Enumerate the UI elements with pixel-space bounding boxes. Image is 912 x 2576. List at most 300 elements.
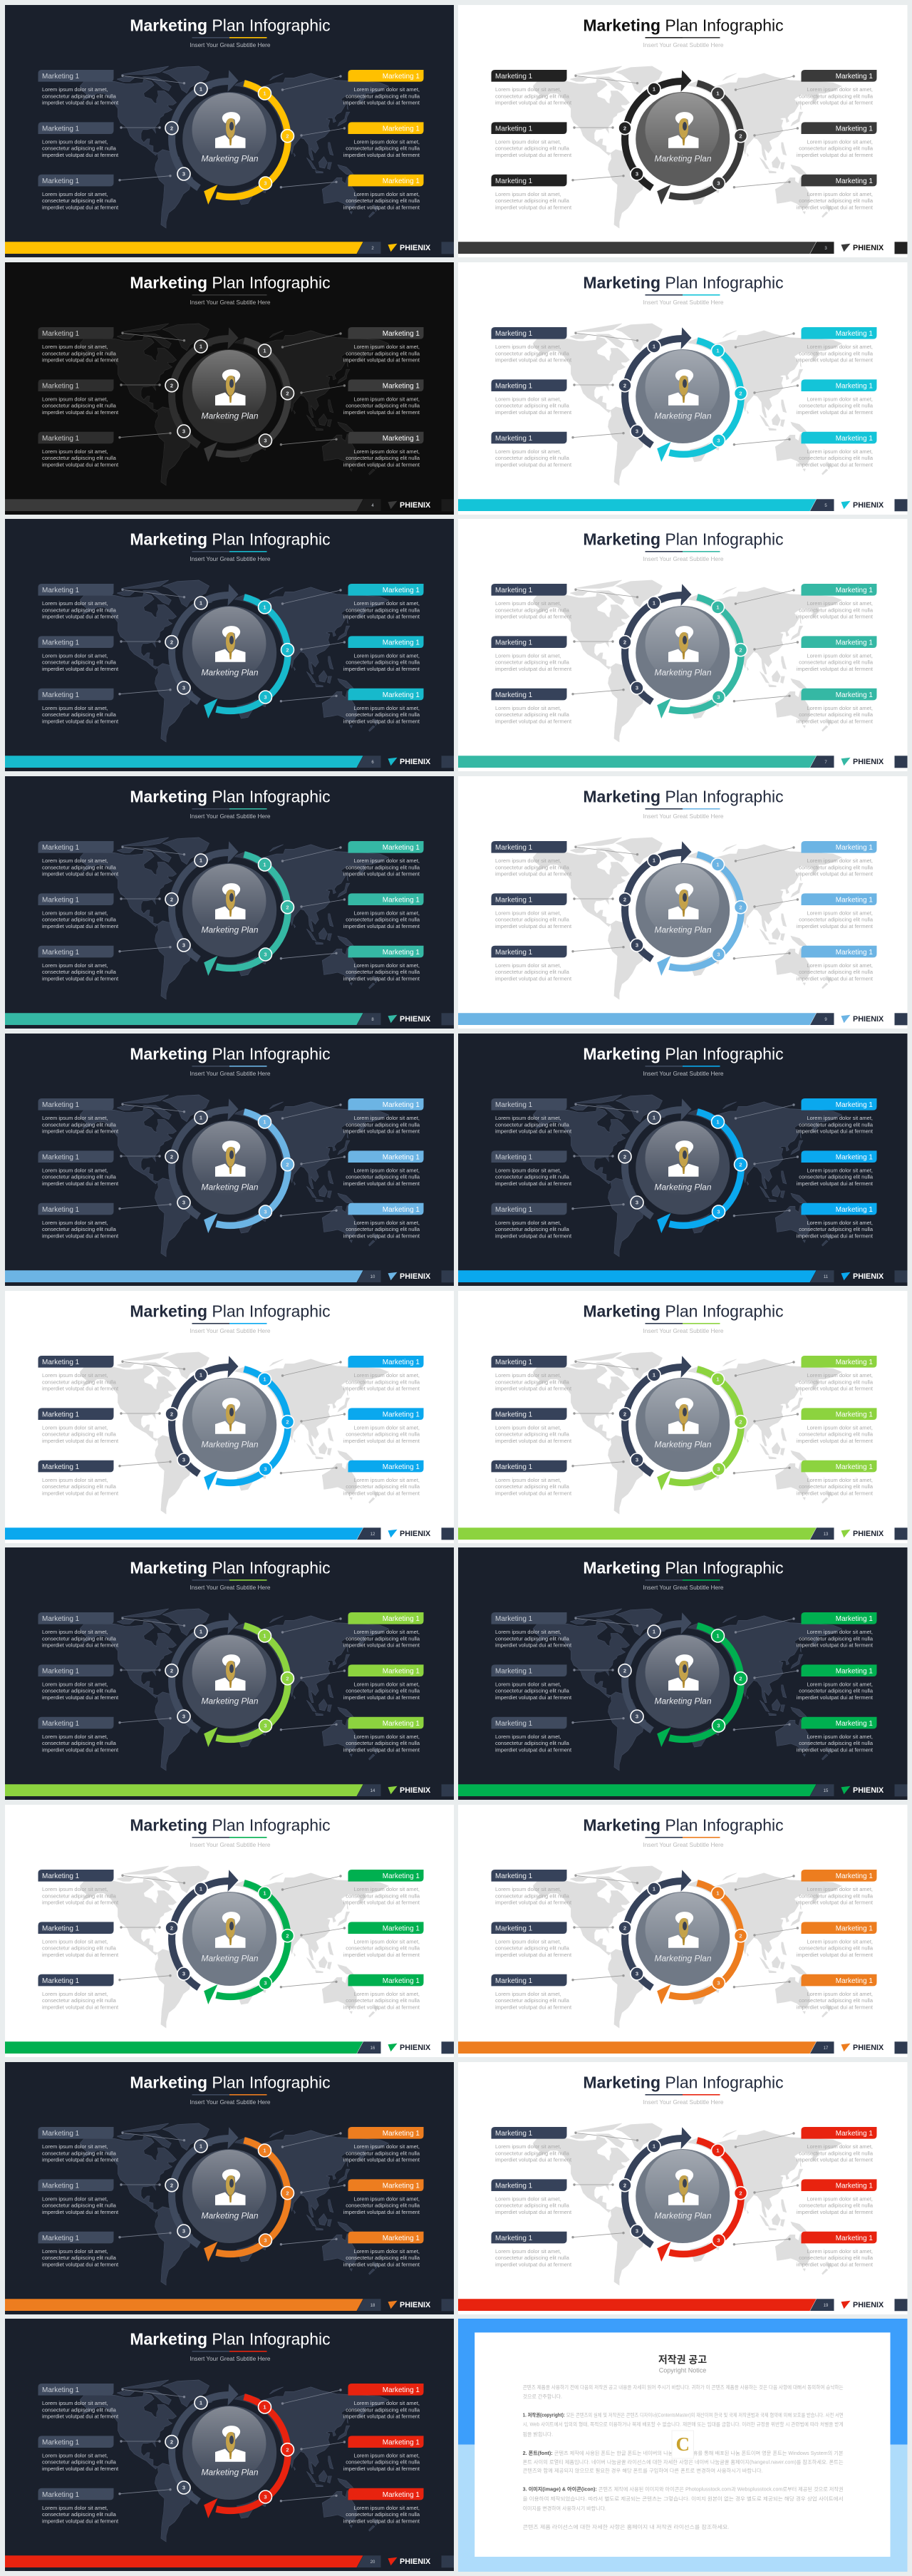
card: right 1: consectetur adipiscing elit nulla — [346, 1892, 420, 1899]
card: left 1: consectetur adipiscing elit nulla — [41, 2407, 116, 2413]
card: left 2: consectetur adipiscing elit nulla — [41, 659, 116, 666]
card: right 1: consectetur adipiscing elit nulla — [346, 864, 420, 870]
card: left 1 — [492, 841, 572, 877]
arrow: left arc — [625, 841, 692, 959]
card: left 3: Lorem ipsum dolor sit amet, — [495, 448, 561, 454]
card: right 2 — [343, 122, 423, 158]
card: right 3: consectetur adipiscing elit nulla — [346, 455, 420, 461]
card: left 2 — [492, 122, 572, 158]
card: left 3: Lorem ipsum dolor sit amet, — [41, 1733, 108, 1740]
card: left 1: consectetur adipiscing elit nulla — [495, 864, 570, 870]
card: right 2: consectetur adipiscing elit nulla — [346, 402, 420, 408]
footer: 17 — [824, 2046, 829, 2051]
card: right 2 — [343, 2179, 423, 2215]
center hub — [629, 599, 736, 706]
center hub — [176, 1371, 283, 1478]
panel: slide 19 white red — [458, 2062, 908, 2314]
card: right 1: Lorem ipsum dolor sit amet, — [353, 1115, 419, 1121]
step nodes: 3 — [182, 2485, 185, 2491]
connector lines — [118, 75, 345, 188]
card: right 1: Lorem ipsum dolor sit amet, — [807, 2143, 873, 2150]
card: right 3 — [343, 2488, 423, 2525]
card: left 2 — [492, 1922, 572, 1958]
card: right 2: Marketing 1 — [836, 639, 874, 647]
card: left 2 — [38, 1922, 119, 1958]
connector lines — [118, 2389, 345, 2502]
card: left 2: Lorem ipsum dolor sit amet, — [495, 653, 561, 659]
card: left 3: consectetur adipiscing elit nulla — [495, 1226, 570, 1232]
card: left 1 — [492, 584, 572, 620]
connector lines — [118, 332, 345, 445]
card: right 2: Lorem ipsum dolor sit amet, — [353, 1424, 419, 1431]
background — [458, 5, 908, 257]
world map — [80, 1609, 388, 1771]
footer: 3 — [825, 247, 828, 251]
notice body text: 콘텐츠 제품 라이선스에 대한 자세한 사항은 홈페이지 내 저작권 라이선스를 참조하세요. — [523, 2524, 730, 2530]
card: right 3 — [343, 431, 423, 468]
card: left 1: imperdiet volutpat dui at ferment — [41, 2413, 119, 2420]
card: left 2: imperdiet volutpat dui at ferment — [41, 1180, 119, 1187]
card: left 1: Lorem ipsum dolor sit amet, — [41, 1886, 108, 1892]
card: left 3: imperdiet volutpat dui at ferment — [495, 2261, 572, 2267]
world map — [80, 1095, 388, 1257]
card: right 3: consectetur adipiscing elit nulla — [799, 1483, 874, 1490]
title: Marketing Plan Infographic — [130, 2330, 330, 2349]
card: right 3: Marketing 1 — [836, 2235, 874, 2242]
card: right 1 — [343, 584, 423, 620]
card: left 1: Marketing 1 — [495, 1101, 533, 1109]
card: right 2: imperdiet volutpat dui at ferment — [343, 1952, 420, 1958]
card: right 2: Marketing 1 — [382, 1925, 420, 1932]
card: right 3: Lorem ipsum dolor sit amet, — [353, 1991, 419, 1997]
panel: slide 17 white orange — [458, 1805, 908, 2057]
card: left 2: imperdiet volutpat dui at ferment — [495, 1438, 572, 1444]
card: left 3: Lorem ipsum dolor sit amet, — [41, 962, 108, 969]
card: left 1: Marketing 1 — [495, 1359, 533, 1366]
card: right 3: Marketing 1 — [382, 2235, 420, 2242]
card: left 1: Marketing 1 — [41, 844, 79, 852]
hub label: Marketing Plan — [201, 1439, 258, 1449]
card: left 2 — [38, 893, 119, 929]
card: left 1: Marketing 1 — [495, 73, 533, 81]
card: right 2: Lorem ipsum dolor sit amet, — [353, 1938, 419, 1944]
notice subheading: Copyright Notice — [659, 2367, 707, 2374]
card: right 3: imperdiet volutpat dui at ferment — [343, 205, 420, 211]
step nodes: 3 — [636, 1714, 638, 1720]
card: right 1: imperdiet volutpat dui at ferment — [797, 614, 874, 620]
card: left 1: consectetur adipiscing elit nulla — [41, 1635, 116, 1642]
title: Marketing Plan Infographic — [130, 530, 330, 549]
hub label: Marketing Plan — [201, 668, 258, 678]
card: right 1: imperdiet volutpat dui at ferment — [797, 1900, 874, 1906]
footer — [4, 1784, 454, 1796]
card: right 1: imperdiet volutpat dui at ferment — [343, 1900, 420, 1906]
step nodes: 2 — [170, 2439, 173, 2446]
card: left 2: Lorem ipsum dolor sit amet, — [41, 396, 108, 402]
card: right 1: consectetur adipiscing elit nulla — [799, 2150, 874, 2156]
connector lines — [118, 1617, 345, 1731]
card: left 1: imperdiet volutpat dui at ferment — [41, 1642, 119, 1649]
card: right 3 — [797, 1460, 877, 1496]
card: right 3: Lorem ipsum dolor sit amet, — [807, 1220, 873, 1226]
card: right 2: Marketing 1 — [382, 382, 420, 390]
card: right 2: imperdiet volutpat dui at ferment — [343, 923, 420, 929]
card: right 3: consectetur adipiscing elit nulla — [799, 455, 874, 461]
arrow: right arc — [204, 1111, 288, 1233]
center hub — [629, 1885, 736, 1992]
card: left 1: Lorem ipsum dolor sit amet, — [495, 1629, 561, 1635]
card: left 3: consectetur adipiscing elit nulla — [41, 711, 116, 718]
panel: slide 2 dark yellow — [5, 5, 454, 257]
card: right 2: Marketing 1 — [836, 1153, 874, 1161]
footer: 20 — [370, 2560, 375, 2565]
step nodes: 3 — [636, 942, 638, 949]
card: left 2: Marketing 1 — [495, 897, 533, 905]
card: right 2: consectetur adipiscing elit nulla — [799, 1945, 874, 1952]
card: left 1: consectetur adipiscing elit nulla — [495, 1121, 570, 1128]
card: left 2 — [38, 122, 119, 158]
card: left 1: imperdiet volutpat dui at ferment — [495, 871, 572, 877]
card: left 1 — [38, 1356, 119, 1391]
card: right 2 — [343, 1150, 423, 1187]
card: right 1: Marketing 1 — [836, 330, 874, 338]
step nodes: 3 — [636, 1199, 638, 1205]
notice body text: 콘텐츠 제품을 사용하기 전에 다음의 저작권 공고 내용을 자세히 읽어 주시기 바랍니다. 귀하가 이 콘텐츠 제품을 사용하는 것은 다음 사항에 대해서 동의하여 승낙하는 — [523, 2384, 844, 2391]
card: left 1: consectetur adipiscing elit nulla — [495, 607, 570, 614]
step nodes: 1 — [653, 86, 656, 93]
card: left 2: imperdiet volutpat dui at ferment — [495, 1952, 572, 1958]
card: left 2: consectetur adipiscing elit nulla — [41, 145, 116, 152]
card: left 2: Marketing 1 — [495, 125, 533, 133]
card: right 2: consectetur adipiscing elit nulla — [346, 1431, 420, 1437]
icon: person — [668, 1654, 699, 1691]
card: left 3: Marketing 1 — [495, 691, 533, 699]
card: right 3: imperdiet volutpat dui at ferment — [343, 2261, 420, 2267]
card: left 1 — [38, 1612, 119, 1649]
card: left 1 — [492, 327, 572, 363]
card: left 2 — [38, 1408, 119, 1444]
card: right 3 — [343, 1974, 423, 2010]
step nodes: 3 — [264, 437, 266, 443]
title: Marketing Plan Infographic — [584, 1302, 784, 1320]
card: right 1 — [797, 327, 877, 363]
card: right 2: consectetur adipiscing elit nulla — [799, 1688, 874, 1694]
background — [4, 2062, 454, 2314]
notice sheet — [475, 2333, 891, 2557]
card: right 2: imperdiet volutpat dui at ferment — [797, 666, 874, 672]
card: right 3: Lorem ipsum dolor sit amet, — [807, 705, 873, 711]
card: left 2: Lorem ipsum dolor sit amet, — [41, 1167, 108, 1173]
world map — [80, 1351, 388, 1513]
arrow: left arc — [625, 1612, 692, 1731]
card: left 1: consectetur adipiscing elit nulla — [41, 864, 116, 870]
card: right 3: consectetur adipiscing elit nulla — [346, 711, 420, 718]
world map — [533, 1609, 842, 1771]
card: left 1: consectetur adipiscing elit nulla — [41, 2150, 116, 2156]
card: right 2: Marketing 1 — [382, 1153, 420, 1161]
card: left 2: Lorem ipsum dolor sit amet, — [495, 2195, 561, 2202]
step nodes: 1 — [199, 1629, 202, 1635]
card: right 2: Lorem ipsum dolor sit amet, — [807, 910, 873, 916]
background band: blue — [458, 2319, 908, 2445]
card: left 2: consectetur adipiscing elit nulla — [495, 917, 570, 923]
card: left 2: Marketing 1 — [41, 2439, 79, 2447]
card: right 3: Lorem ipsum dolor sit amet, — [807, 448, 873, 454]
card: left 3: consectetur adipiscing elit nulla — [41, 1226, 116, 1232]
card: left 2: Marketing 1 — [41, 1411, 79, 1418]
title: Marketing Plan Infographic — [130, 1558, 330, 1577]
background — [4, 262, 454, 515]
step nodes: 2 — [286, 2190, 289, 2196]
card: left 3: consectetur adipiscing elit nulla — [495, 1740, 570, 1746]
card: right 2: imperdiet volutpat dui at ferment — [797, 2209, 874, 2215]
arrow: left arc — [172, 70, 238, 188]
card: right 3: imperdiet volutpat dui at ferment — [797, 1490, 874, 1496]
card: right 3: Marketing 1 — [382, 1206, 420, 1214]
card: right 2: Marketing 1 — [836, 1925, 874, 1932]
footer — [458, 242, 908, 254]
title rule — [646, 551, 720, 552]
background — [4, 2319, 454, 2571]
card: left 1: Lorem ipsum dolor sit amet, — [495, 86, 561, 93]
card: right 1: Lorem ipsum dolor sit amet, — [807, 1115, 873, 1121]
footer — [4, 1270, 454, 1282]
center hub — [629, 2143, 736, 2250]
card: right 3: Marketing 1 — [836, 435, 874, 443]
card: right 2: Lorem ipsum dolor sit amet, — [807, 1424, 873, 1431]
arrow: right arc — [657, 2140, 741, 2262]
step nodes: 1 — [199, 86, 202, 93]
step nodes — [165, 83, 294, 190]
card: right 1 — [797, 1098, 877, 1134]
notice body text: 됨을 밝힙니다. — [523, 2431, 553, 2438]
card: left 2: Marketing 1 — [41, 1153, 79, 1161]
card: right 3: imperdiet volutpat dui at ferment — [343, 718, 420, 725]
card: left 2: consectetur adipiscing elit nulla — [41, 1688, 116, 1694]
card: left 2: Marketing 1 — [495, 639, 533, 647]
step nodes: 2 — [623, 1153, 626, 1160]
card: right 1: Lorem ipsum dolor sit amet, — [807, 344, 873, 350]
card: right 1 — [343, 1612, 423, 1649]
step nodes: 1 — [263, 347, 266, 354]
card: right 3: Lorem ipsum dolor sit amet, — [353, 191, 419, 197]
connector lines — [118, 846, 345, 959]
card: right 3: Lorem ipsum dolor sit amet, — [353, 1220, 419, 1226]
step nodes — [165, 2396, 294, 2503]
hub label: Marketing Plan — [201, 1954, 258, 1964]
card: right 1 — [343, 70, 423, 106]
footer: PHIENIX — [853, 244, 884, 252]
card: left 2: imperdiet volutpat dui at ferment — [495, 666, 572, 672]
card: right 3: Marketing 1 — [836, 1720, 874, 1728]
card: right 2: Lorem ipsum dolor sit amet, — [353, 910, 419, 916]
step nodes: 1 — [653, 1629, 656, 1635]
step nodes — [618, 1625, 747, 1732]
card: right 1: consectetur adipiscing elit nulla — [346, 2407, 420, 2413]
center hub — [629, 343, 736, 450]
card: right 1: imperdiet volutpat dui at ferment — [797, 356, 874, 363]
title: Marketing Plan Infographic — [584, 273, 784, 292]
step nodes: 1 — [263, 604, 266, 611]
step nodes: 3 — [182, 1199, 185, 1205]
card: right 2: Lorem ipsum dolor sit amet, — [353, 1681, 419, 1688]
subtitle: Insert Your Great Subtitle Here — [643, 813, 724, 820]
card: left 3: imperdiet volutpat dui at ferment — [41, 1232, 119, 1239]
hub label: Marketing Plan — [201, 1696, 258, 1706]
card: left 1: imperdiet volutpat dui at ferment — [495, 1385, 572, 1391]
card: left 1: consectetur adipiscing elit nulla — [41, 1121, 116, 1128]
step nodes: 1 — [263, 2404, 266, 2411]
card: left 2: imperdiet volutpat dui at ferment — [495, 152, 572, 158]
arrow: right arc — [657, 83, 741, 205]
card: right 1: imperdiet volutpat dui at ferment — [797, 871, 874, 877]
card: left 3: Marketing 1 — [41, 2235, 79, 2242]
card: right 1: consectetur adipiscing elit nulla — [346, 607, 420, 614]
card: right 3: consectetur adipiscing elit nulla — [799, 711, 874, 718]
arrow: left arc — [172, 1356, 238, 1473]
hub label: Marketing Plan — [201, 925, 258, 935]
arrow: right arc — [657, 1369, 741, 1490]
step nodes — [618, 854, 747, 961]
step nodes — [165, 1111, 294, 1218]
connector lines — [572, 1617, 799, 1731]
card: left 3: Marketing 1 — [495, 1206, 533, 1214]
footer: 11 — [824, 1275, 829, 1279]
icon: person — [215, 2426, 245, 2462]
step nodes — [618, 83, 747, 190]
step nodes: 3 — [264, 694, 266, 701]
footer: 12 — [370, 1532, 375, 1537]
center hub — [629, 1628, 736, 1735]
card: right 1: Marketing 1 — [836, 1101, 874, 1109]
card: left 1: Marketing 1 — [495, 2130, 533, 2138]
card: right 1: Lorem ipsum dolor sit amet, — [807, 1371, 873, 1379]
card: left 2: Lorem ipsum dolor sit amet, — [41, 910, 108, 916]
step nodes: 2 — [286, 1932, 289, 1939]
icon: person — [215, 2169, 245, 2205]
step nodes: 2 — [170, 1668, 173, 1674]
footer: 14 — [370, 1789, 375, 1793]
card: left 2: consectetur adipiscing elit nulla — [495, 1431, 570, 1437]
card: left 3: Marketing 1 — [41, 177, 79, 185]
step nodes: 3 — [717, 952, 720, 958]
step nodes: 1 — [653, 343, 656, 349]
card: left 3 — [38, 175, 119, 211]
connector lines — [572, 589, 799, 702]
card: right 3: imperdiet volutpat dui at ferment — [343, 976, 420, 982]
card: right 3: Lorem ipsum dolor sit amet, — [353, 1476, 419, 1483]
step nodes: 1 — [199, 600, 202, 607]
background — [458, 1290, 908, 1542]
card: right 3: imperdiet volutpat dui at ferment — [797, 2261, 874, 2267]
subtitle: Insert Your Great Subtitle Here — [190, 1841, 270, 1848]
card: left 2: consectetur adipiscing elit nulla — [41, 2202, 116, 2208]
card: left 3: consectetur adipiscing elit nulla — [41, 1997, 116, 2004]
connector lines — [118, 2132, 345, 2245]
icon: person — [215, 1912, 245, 1948]
title: Marketing Plan Infographic — [130, 1815, 330, 1834]
step nodes: 1 — [653, 600, 656, 607]
card: left 1 — [492, 1870, 572, 1906]
card: right 1: Lorem ipsum dolor sit amet, — [353, 86, 419, 93]
card: right 3: imperdiet volutpat dui at ferment — [797, 461, 874, 468]
subtitle: Insert Your Great Subtitle Here — [190, 1584, 270, 1591]
card: right 2: imperdiet volutpat dui at ferment — [343, 409, 420, 416]
world map — [80, 66, 388, 228]
card: left 2: consectetur adipiscing elit nulla — [495, 145, 570, 152]
card: left 1: imperdiet volutpat dui at ferment — [41, 2156, 119, 2163]
step nodes: 1 — [653, 1886, 656, 1892]
world map — [533, 324, 842, 485]
card: left 3: consectetur adipiscing elit nulla — [495, 969, 570, 975]
card: left 3: consectetur adipiscing elit nulla — [495, 455, 570, 461]
card: right 2: Marketing 1 — [836, 125, 874, 133]
connector lines — [118, 1875, 345, 1988]
step nodes: 1 — [263, 1118, 266, 1125]
card: right 1: imperdiet volutpat dui at ferment — [797, 100, 874, 106]
card: left 1 — [38, 2127, 119, 2163]
footer: PHIENIX — [399, 2301, 430, 2309]
card: left 3: imperdiet volutpat dui at ferment — [495, 1490, 572, 1496]
card: left 3: imperdiet volutpat dui at ferment — [495, 1747, 572, 1753]
step nodes: 3 — [636, 685, 638, 691]
step nodes — [618, 1882, 747, 1989]
card: right 1: consectetur adipiscing elit nulla — [346, 1121, 420, 1128]
card: left 3: imperdiet volutpat dui at ferment — [41, 461, 119, 468]
background — [4, 1547, 454, 1800]
card: right 2 — [797, 1408, 877, 1444]
card: left 3: Lorem ipsum dolor sit amet, — [41, 191, 108, 197]
card: right 1: Lorem ipsum dolor sit amet, — [353, 1886, 419, 1892]
card: left 1: Lorem ipsum dolor sit amet, — [41, 1115, 108, 1121]
background — [458, 519, 908, 771]
card: left 3: consectetur adipiscing elit nulla — [41, 2255, 116, 2261]
card: left 3: Marketing 1 — [41, 2491, 79, 2499]
center hub — [629, 1371, 736, 1478]
card: right 2: imperdiet volutpat dui at ferment — [797, 923, 874, 929]
title rule — [192, 2094, 266, 2095]
card: right 2 — [343, 2436, 423, 2472]
card: right 1: consectetur adipiscing elit nulla — [346, 1635, 420, 1642]
card: right 3: imperdiet volutpat dui at ferment — [797, 205, 874, 211]
footer: PHIENIX — [399, 758, 430, 766]
card: right 3: Marketing 1 — [382, 1977, 420, 1985]
footer — [458, 1784, 908, 1796]
center hub — [176, 2143, 283, 2250]
title rule — [192, 1580, 266, 1581]
arrow: left arc — [172, 1612, 238, 1731]
card: left 1: consectetur adipiscing elit nulla — [41, 607, 116, 614]
card: right 3: imperdiet volutpat dui at ferment — [343, 2518, 420, 2525]
card: left 2 — [492, 2179, 572, 2215]
card: left 2: Lorem ipsum dolor sit amet, — [41, 1424, 108, 1431]
connector lines — [118, 589, 345, 702]
card: left 2: imperdiet volutpat dui at ferment — [495, 923, 572, 929]
step nodes — [618, 1111, 747, 1218]
title: Marketing Plan Infographic — [584, 1044, 784, 1063]
card: left 2: imperdiet volutpat dui at ferment — [41, 2209, 119, 2215]
step nodes: 2 — [170, 125, 173, 131]
card: left 2: consectetur adipiscing elit nulla — [495, 1945, 570, 1952]
arrow: left arc — [172, 841, 238, 959]
card: right 1: Marketing 1 — [382, 1615, 420, 1623]
step nodes: 2 — [170, 1153, 173, 1160]
panel: slide 15 dark green — [458, 1547, 908, 1800]
card: left 2: Lorem ipsum dolor sit amet, — [41, 2195, 108, 2202]
card: right 2: imperdiet volutpat dui at ferment — [343, 1180, 420, 1187]
card: right 2: Marketing 1 — [382, 1411, 420, 1418]
step nodes — [618, 597, 747, 704]
